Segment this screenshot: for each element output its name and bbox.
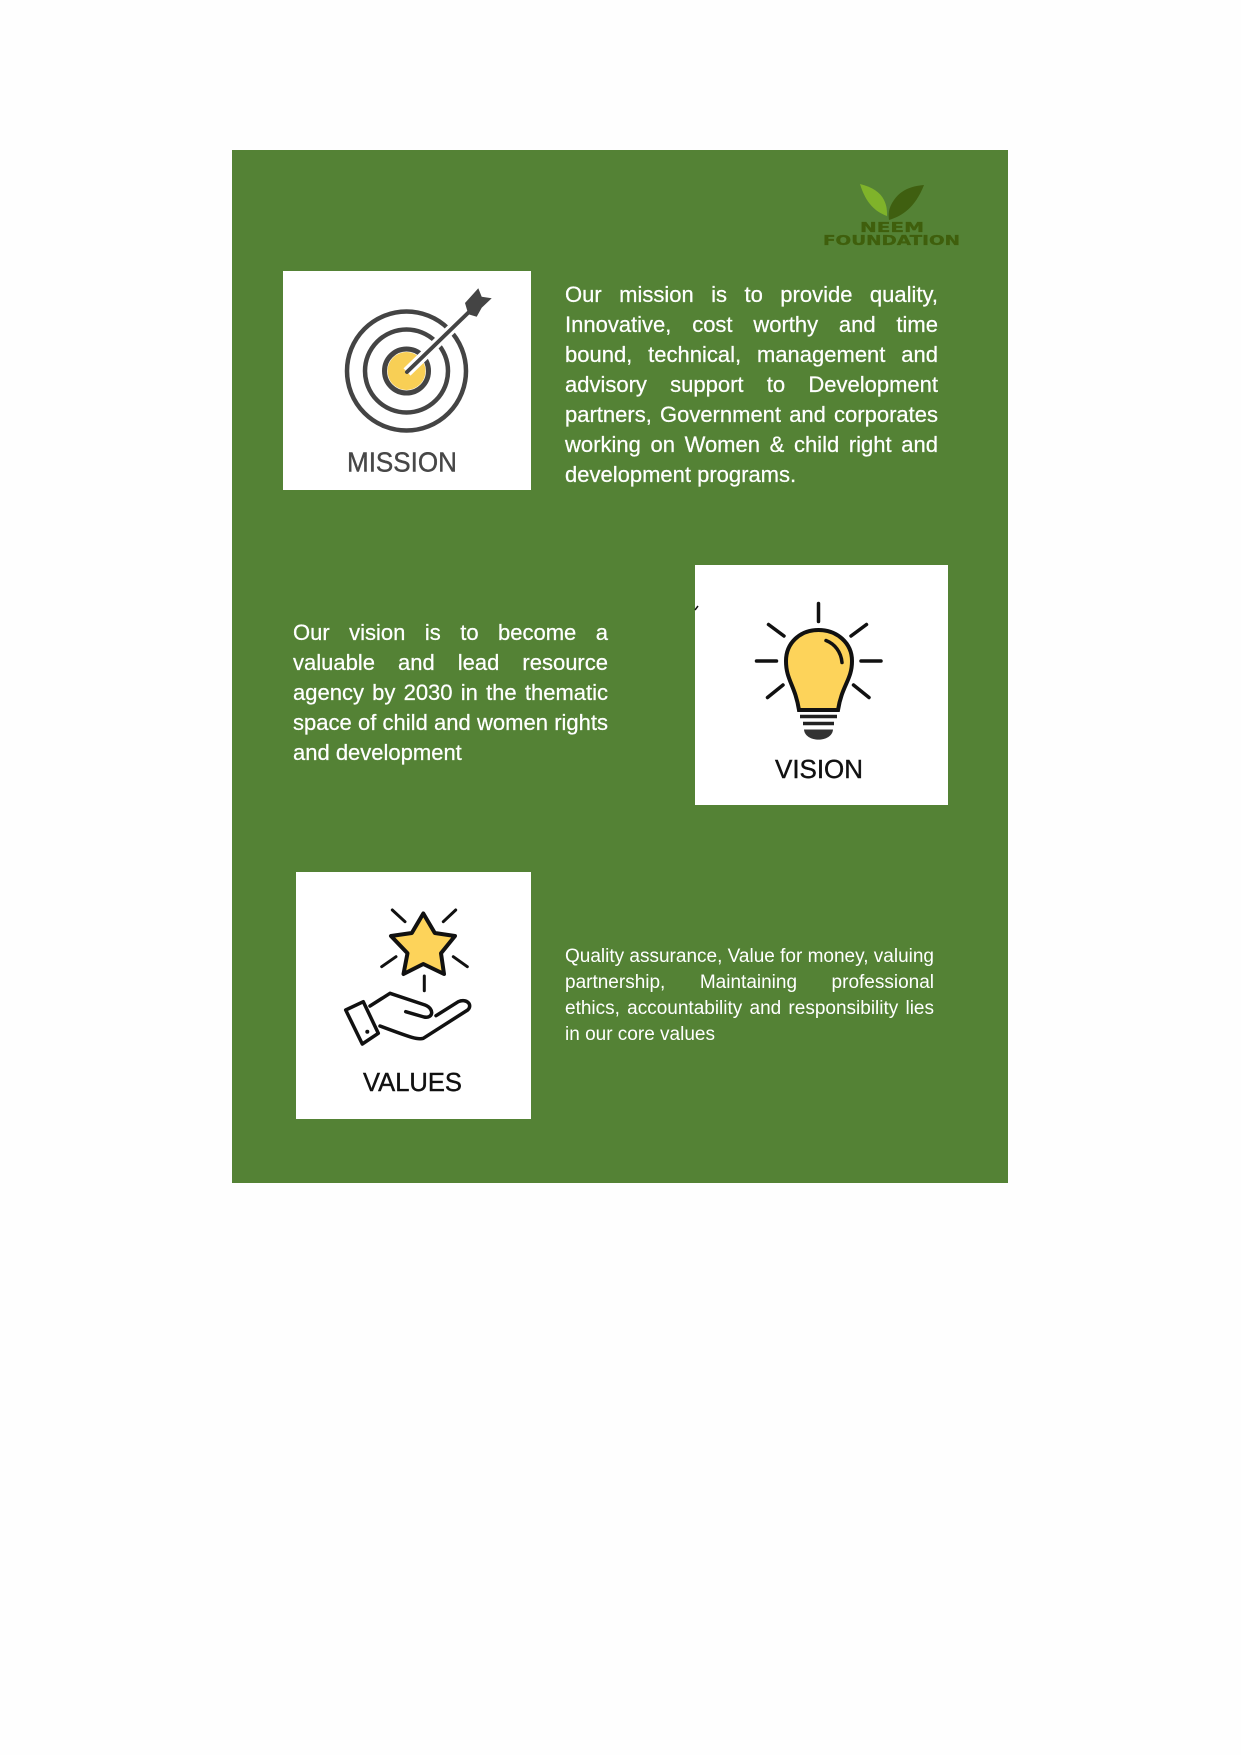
card: values [296,872,531,1119]
text: vision statement [292,620,608,765]
text: mission statement [564,282,938,487]
icon: star over hand [344,908,472,1046]
text: mission statement: Our mission is to provide quality, [565,282,938,307]
text: vision statement: agency by 2030 in the thematic [293,680,608,705]
text: mission statement: bound, technical, management and [565,342,938,367]
logo: Neem Foundation: FOUNDATION [823,234,960,249]
text: mission statement: partners, Government and corporates [565,402,938,427]
text: values statement [565,946,934,1045]
card: vision [695,565,948,805]
text: values statement: ethics, accountability and responsibility lies [565,998,934,1019]
text: mission statement: development programs. [565,462,796,487]
logo: Neem Foundation [823,184,960,249]
tick mark [694,606,698,610]
panel: green background [232,150,1008,1183]
logo: Neem Foundation: NEEM [860,221,924,236]
text: values statement: partnership, Maintaining professional [565,972,934,993]
text: vision statement: and development [293,740,462,765]
text: values statement: Quality assurance, Value for money, valuing [565,946,934,967]
icon: target with arrow [344,288,492,433]
label: VISION: VISION [775,756,863,784]
label: VALUES: VALUES [363,1069,462,1097]
text: mission statement: working on Women & child right and [565,432,938,457]
label: MISSION: MISSION [347,446,457,478]
text: vision statement: space of child and women rights [293,710,608,735]
text: vision statement: Our vision is to become a [293,620,608,645]
text: mission statement: Innovative, cost worthy and time [565,312,938,337]
text: values statement: in our core values [565,1024,715,1045]
text: mission statement: advisory support to Development [565,372,938,397]
text: vision statement: valuable and lead resource [293,650,608,675]
card: mission [283,271,531,490]
icon: light bulb [754,602,883,740]
